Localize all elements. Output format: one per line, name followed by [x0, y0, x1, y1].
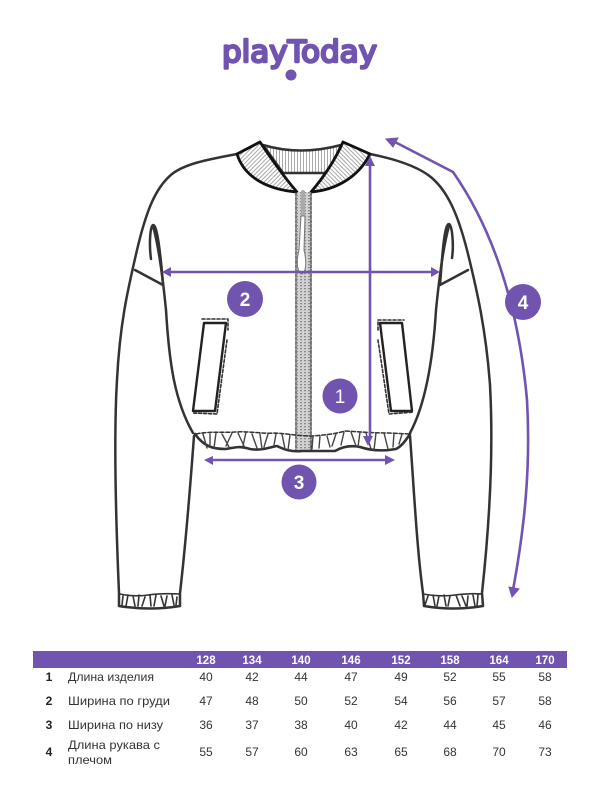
row 3: 45: [492, 718, 506, 732]
row 2: 57: [492, 694, 506, 708]
row 2: 52: [344, 694, 358, 708]
row 3: 40: [344, 718, 358, 732]
marker 2: 2: [240, 290, 250, 311]
table header: 128: [196, 655, 216, 667]
row 4: 4: [46, 745, 53, 759]
table header: 164: [489, 655, 509, 667]
arrow 1: garment length: [363, 156, 375, 446]
row 1: 40: [199, 670, 213, 684]
row 3: Ширина по низу: [68, 718, 163, 732]
logo: playToday: [222, 35, 377, 70]
back collar: [263, 145, 341, 173]
right sleeve and shoulder outline: [370, 154, 491, 608]
marker 4: 4: [518, 293, 529, 314]
row 1: 42: [245, 670, 259, 684]
row 3: 38: [294, 718, 308, 732]
row 4: 70: [492, 745, 506, 759]
left sleeve and shoulder outline: [115, 154, 237, 608]
row 4: 55: [199, 745, 213, 759]
left body side: [153, 226, 193, 433]
row 4: 68: [443, 745, 457, 759]
row 1: 58: [538, 670, 552, 684]
jacket technical drawing: [115, 142, 491, 608]
row 1: 1: [46, 670, 53, 684]
row 1: 47: [344, 670, 358, 684]
table header: 134: [242, 655, 262, 667]
measurement arrows: [162, 138, 528, 597]
zipper: [296, 192, 311, 451]
table header: [33, 651, 567, 668]
logo dot: [286, 70, 296, 80]
zipper pull: [297, 216, 306, 274]
marker 3: 3: [294, 473, 304, 494]
row 3: 44: [443, 718, 457, 732]
row 1: 52: [443, 670, 457, 684]
marker 1: [322, 378, 358, 414]
marker 4: [505, 284, 541, 320]
marker 1: 1: [335, 387, 345, 408]
right cuff: [423, 594, 482, 606]
left cuff: [120, 594, 180, 606]
arrow 2: chest width: [162, 267, 440, 277]
row 3: 3: [46, 718, 53, 732]
row 4: 60: [294, 745, 308, 759]
table header: 170: [535, 655, 555, 667]
row 2: Ширина по груди: [68, 694, 170, 708]
table header: 152: [391, 655, 411, 667]
row 4: 73: [538, 745, 552, 759]
row 2: 58: [538, 694, 552, 708]
row 3: 42: [394, 718, 408, 732]
table header: 158: [440, 655, 460, 667]
right pocket: [378, 320, 414, 414]
right body side: [410, 226, 449, 433]
row 1: 55: [492, 670, 506, 684]
left pocket: [193, 319, 228, 414]
row 1: Длина изделия: [68, 670, 154, 684]
right collar: [311, 142, 370, 192]
row 3: 46: [538, 718, 552, 732]
row 4: [46, 738, 552, 767]
row 1: [46, 670, 552, 684]
size table: [33, 651, 567, 767]
row 2: 48: [245, 694, 259, 708]
row 4: 65: [394, 745, 408, 759]
arrow 4: sleeve length: [386, 138, 528, 597]
row 1: 49: [394, 670, 408, 684]
arrow 3: hem width: [204, 455, 395, 465]
row 4: Длина рукава с: [68, 738, 160, 752]
row 2: 47: [199, 694, 213, 708]
row 2: [46, 694, 552, 708]
row 4: 57: [245, 745, 259, 759]
marker 3: [282, 464, 316, 500]
row 3: 36: [199, 718, 213, 732]
row 2: 54: [394, 694, 408, 708]
row 3: [46, 718, 552, 732]
row 2: 2: [46, 694, 53, 708]
left collar: [237, 142, 297, 192]
row 1: 44: [294, 670, 308, 684]
table header: 146: [341, 655, 361, 667]
row 2: 56: [443, 694, 457, 708]
hem with gathers: [195, 431, 410, 451]
row 4: плечом: [68, 753, 112, 767]
row 4: 63: [344, 745, 358, 759]
row 3: 37: [245, 718, 259, 732]
row 2: 50: [294, 694, 308, 708]
table header: 140: [291, 655, 311, 667]
armhole darts: [135, 225, 163, 285]
marker 2: [227, 281, 263, 317]
